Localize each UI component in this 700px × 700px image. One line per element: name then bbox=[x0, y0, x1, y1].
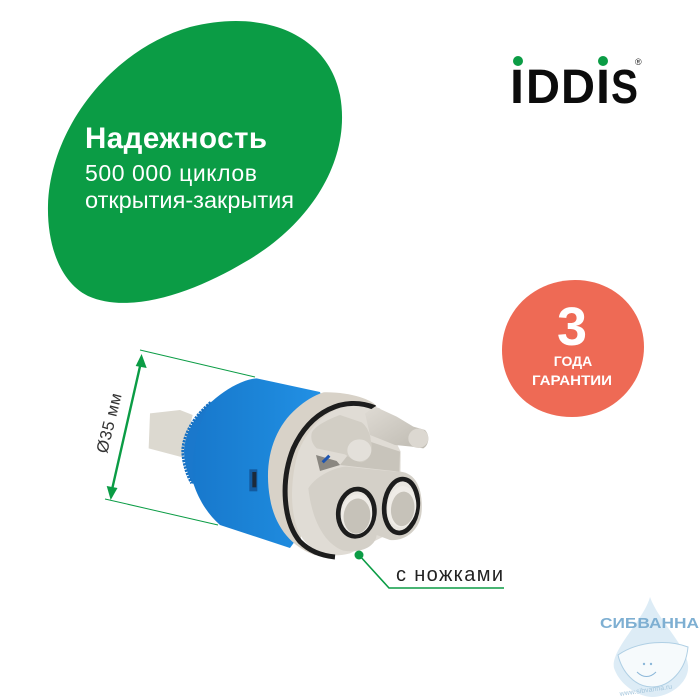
water drop bbox=[614, 597, 688, 697]
panel: green reliability blob bbox=[48, 21, 342, 303]
logo letter S: S bbox=[611, 61, 638, 114]
extension lines bbox=[105, 350, 255, 525]
logo dot left bbox=[513, 56, 523, 66]
logo: IDDIS bbox=[510, 56, 642, 114]
dimension: diameter 35 mm bbox=[93, 350, 255, 525]
text: open-close: открытия-закрытия bbox=[85, 187, 294, 213]
dimension label: Ø35 мм bbox=[93, 391, 126, 455]
callout: with legs bbox=[354, 550, 504, 588]
heading: reliability: Надежность bbox=[85, 122, 267, 155]
front peg bbox=[311, 415, 372, 462]
collar base bbox=[184, 402, 220, 484]
bathtub bbox=[618, 642, 688, 687]
callout text: с ножками bbox=[396, 564, 503, 586]
logo letter D second: D bbox=[561, 61, 595, 114]
callout dot bbox=[354, 550, 364, 560]
dimension arrow bbox=[111, 362, 141, 494]
front peg tip bbox=[347, 439, 371, 461]
callout leader bbox=[359, 555, 504, 588]
green blob shape bbox=[48, 21, 342, 303]
bath eye right bbox=[650, 663, 652, 665]
side slot bbox=[249, 469, 257, 491]
watermark name: СИБВАННА bbox=[600, 616, 700, 632]
right port seal bbox=[382, 477, 420, 535]
left port bore bbox=[342, 497, 372, 535]
knurled collar bbox=[183, 402, 211, 483]
shadow gap with blue wire bbox=[316, 455, 340, 471]
panel: warranty badge bbox=[502, 280, 644, 417]
logo letter D: D bbox=[526, 61, 560, 114]
top arrowhead bbox=[136, 354, 147, 368]
bath smile bbox=[637, 672, 656, 676]
face plate bbox=[292, 404, 401, 555]
right port bore bbox=[389, 490, 416, 527]
rear peg tip bbox=[408, 429, 428, 448]
registered mark: ® bbox=[635, 57, 642, 67]
watermark url: www.sibvanna.ru bbox=[618, 684, 673, 698]
logo dot right bbox=[598, 56, 608, 66]
text: cycles: 500 000 циклов bbox=[85, 160, 257, 186]
left port bbox=[336, 487, 377, 538]
logo letter I: I bbox=[510, 61, 524, 114]
watermark: Sibvanna bbox=[600, 597, 700, 698]
bottom arrowhead bbox=[107, 486, 118, 500]
left port seal bbox=[336, 487, 377, 538]
blue body bbox=[192, 378, 347, 548]
logo letter I second: I bbox=[596, 61, 610, 114]
right port wall bbox=[386, 485, 418, 529]
black o-ring bbox=[285, 403, 375, 557]
cartridge back: stem and blue body bbox=[149, 378, 347, 548]
red circle bbox=[502, 280, 644, 417]
rear support bbox=[340, 442, 400, 472]
rear peg bbox=[365, 407, 428, 448]
side slot inner bbox=[252, 472, 256, 487]
warranty number: 3 bbox=[557, 297, 587, 357]
grey rim bbox=[268, 392, 377, 556]
warranty word: guarantee: ГАРАНТИИ bbox=[532, 372, 612, 388]
stem bbox=[149, 410, 193, 457]
right port bbox=[382, 477, 420, 535]
port block bbox=[308, 467, 422, 551]
blue wire bbox=[323, 456, 329, 462]
cartridge product illustration bbox=[149, 378, 428, 557]
left port wall bbox=[339, 493, 374, 536]
bath eye left bbox=[643, 663, 645, 665]
cartridge front: rim, o-ring, pegs, ports bbox=[268, 392, 428, 557]
warranty word: years: ГОДА bbox=[554, 353, 592, 369]
